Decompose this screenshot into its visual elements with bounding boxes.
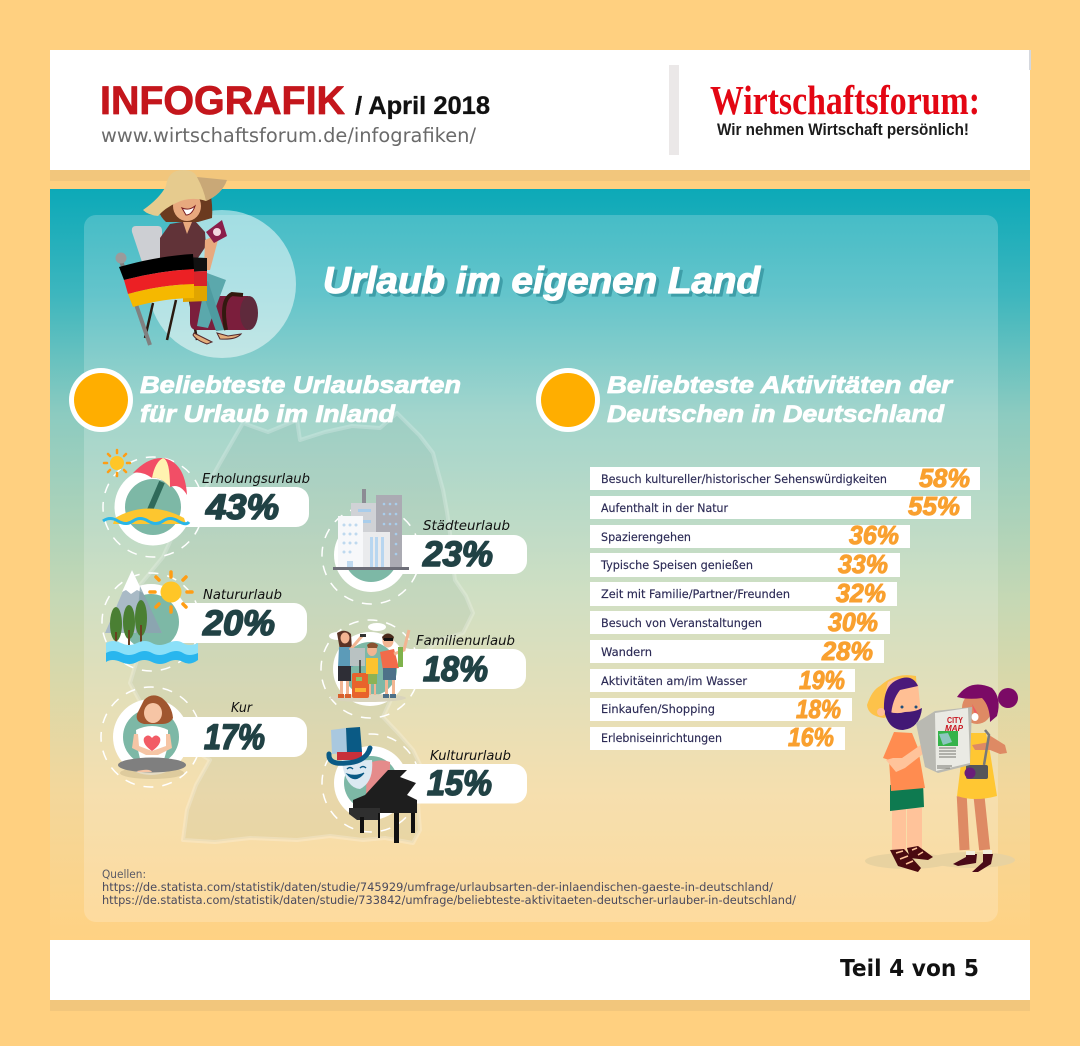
bar chart: activities [590, 463, 980, 752]
bar: Veranstaltungen 30%: 30% [828, 607, 878, 637]
logo: Wirtschaftsforum: [710, 77, 980, 123]
main gradient panel [50, 189, 1030, 940]
bar: Veranstaltungen 30% [590, 607, 890, 637]
bar: Familie 32% [590, 578, 897, 608]
bar: Speisen 33% [590, 549, 900, 579]
title: Urlaub im eigenen Land [323, 260, 761, 301]
icon: couple with city map [865, 675, 1018, 872]
sources: https://de.statista.com/statistik/daten/studie/733842/umfrage/beliebteste-aktivitaeten-deutscher-urlauber-in-deutschland/ [102, 893, 796, 907]
bar: Sehenswürdigkeiten 58%: Besuch kultureller/historischer Sehenswürdigkeiten [601, 472, 887, 486]
header date: / April 2018 [355, 92, 490, 120]
logo: Wir nehmen Wirtschaft persönlich! [717, 120, 969, 139]
bar: Wasser 19%: 19% [799, 665, 845, 695]
bar: Einkaufen 18% [590, 694, 852, 724]
card: Kur: 17% [204, 718, 265, 757]
bar: Spazierengehen 36% [590, 520, 910, 550]
bar: Spazierengehen 36%: Spazierengehen [601, 530, 691, 544]
icon: beach umbrella [103, 450, 189, 524]
icon: family with luggage [329, 623, 412, 702]
card: Kultururlaub: Kultururlaub [430, 749, 511, 764]
icon: meditating woman [118, 695, 186, 779]
bar: Speisen 33%: Typische Speisen genießen [600, 558, 753, 572]
card: Kur: Kur [231, 701, 254, 716]
sources: https://de.statista.com/statistik/daten/studie/745929/umfrage/urlaubsarten-der-inlaendischen-gaeste-in-deutschland/ [102, 880, 773, 894]
card: Kultururlaub [322, 727, 527, 843]
section heading: Urlaubsarten: für Urlaub im Inland [140, 401, 396, 428]
section heading: Urlaubsarten: Beliebteste Urlaubsarten [140, 372, 461, 399]
bar: Erlebnis 16%: 16% [788, 722, 834, 752]
bar: Speisen 33%: 33% [838, 549, 888, 579]
bar: Einkaufen 18%: 18% [796, 694, 841, 724]
bar: Familie 32%: 32% [836, 578, 886, 608]
card: Erholungsurlaub [103, 450, 310, 557]
woman [953, 685, 1018, 872]
card: Familienurlaub [321, 620, 526, 718]
card: Erholungsurlaub: 43% [205, 488, 279, 527]
inner panel [84, 215, 998, 922]
bar: Spazierengehen 36%: 36% [849, 520, 899, 550]
icon: theatre masks, top hat and piano [329, 727, 417, 843]
bar: Wandern 28% [590, 636, 884, 666]
card: Familienurlaub: 18% [423, 650, 488, 689]
card: Kultururlaub: 15% [427, 764, 492, 803]
bar: Natur 55%: Aufenthalt in der Natur [601, 501, 728, 515]
card: Naturlaub: Natururlaub [203, 588, 282, 603]
card: Familienurlaub: Familienurlaub [416, 634, 515, 649]
section heading: Urlaubsarten [69, 368, 461, 432]
bar: Erlebnis 16%: Erlebniseinrichtungen [601, 731, 722, 745]
title circle [148, 210, 296, 358]
icon: mountain, trees and sun [105, 570, 198, 664]
footer bar [50, 940, 1030, 1011]
header title: INFOGRAFIK [100, 79, 345, 123]
icon: city buildings [333, 489, 409, 570]
bar: Wasser 19% [590, 665, 855, 695]
city map: CITY [947, 716, 964, 725]
city map [916, 707, 972, 773]
title: Urlaub im eigenen Land [326, 263, 764, 304]
bar: Familie 32%: Zeit mit Familie/Partner/Freunden [601, 587, 790, 601]
man [867, 675, 933, 872]
bar: Sehenswürdigkeiten 58%: 58% [919, 463, 970, 493]
bar: Einkaufen 18%: Einkaufen/Shopping [601, 702, 715, 716]
sources: Quellen: [102, 867, 146, 881]
section heading: Aktivitäten [536, 368, 954, 432]
section heading: Aktivitäten: Deutschen in Deutschland [607, 401, 945, 428]
card: Naturlaub [102, 570, 307, 671]
bar: Sehenswürdigkeiten 58% [590, 463, 980, 493]
card: Erholungsurlaub: Erholungsurlaub [202, 472, 310, 487]
sources [102, 867, 796, 907]
bar: Natur 55%: 55% [908, 491, 960, 521]
header url: www.wirtschaftsforum.de/infografiken/ [101, 124, 476, 147]
card: Städteurlaub [322, 489, 527, 604]
bar: Wasser 19%: Aktivitäten am/im Wasser [601, 674, 747, 688]
card: Städteurlaub: Städteurlaub [423, 519, 510, 534]
logo [710, 77, 980, 139]
city map: MAP [945, 724, 964, 733]
icon: woman with German flag [116, 170, 258, 345]
footer text: Teil 4 von 5 [840, 956, 979, 982]
header panel [50, 50, 1031, 181]
card: Naturlaub: 20% [202, 604, 275, 643]
bar: Veranstaltungen 30%: Besuch von Veranstaltungen [601, 616, 762, 630]
bar: Erlebnis 16% [590, 722, 845, 752]
map of Germany (background) [130, 413, 473, 843]
section heading: Aktivitäten: Beliebteste Aktivitäten der [607, 372, 954, 399]
bar: Wandern 28%: Wandern [601, 645, 652, 659]
card: Kur [101, 687, 307, 787]
bar: Wandern 28%: 28% [821, 636, 873, 666]
card: Städteurlaub: 23% [422, 535, 493, 574]
bar: Natur 55% [590, 491, 971, 521]
